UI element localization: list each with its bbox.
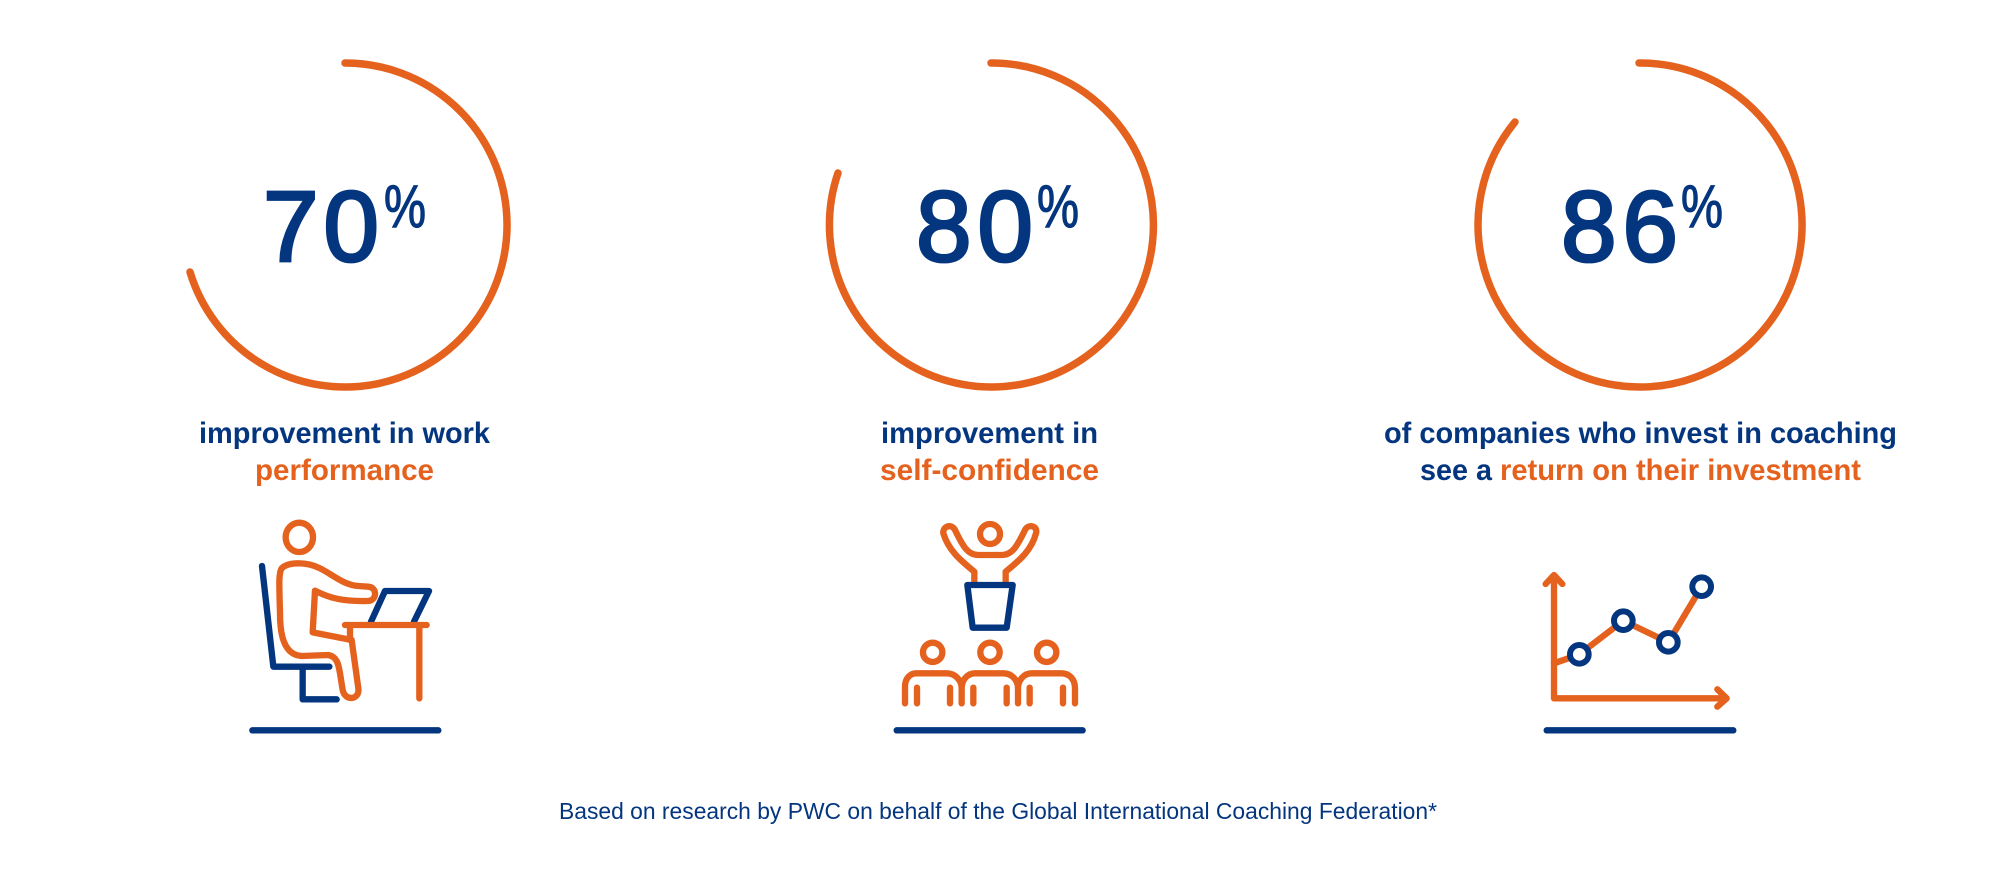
icon: rising line chart [1546, 575, 1733, 730]
label: of companies who invest in coaching see a return on their investment [1384, 417, 1897, 487]
statistic: 86%: 86 [1561, 171, 1678, 283]
label: improvement in work performance: performance [255, 454, 434, 487]
statistic: 86%: % [1681, 173, 1723, 240]
statistic: 80%: % [1037, 173, 1079, 240]
progress ring: 86% [1478, 63, 1802, 387]
statistic: 70%: % [384, 173, 426, 240]
label: of companies who invest in coaching see a return on their investment: see a [1420, 454, 1492, 487]
label: improvement in self-confidence: self-confidence [880, 454, 1099, 487]
statistic: 70%: 70 [263, 171, 379, 283]
label: improvement in work performance: improvement in work [199, 417, 490, 450]
label: improvement in self-confidence [880, 417, 1099, 487]
label: of companies who invest in coaching see a return on their investment: of companies who invest in coaching [1384, 417, 1897, 450]
progress ring: 80% [829, 63, 1153, 387]
label: improvement in work performance [199, 417, 490, 487]
icon: speaker with raised arms above audience [897, 524, 1083, 730]
panel: 86% return on investment [1384, 63, 1897, 730]
panel: 70% work performance [190, 63, 507, 730]
label: improvement in self-confidence: improvement in [881, 417, 1098, 450]
label: of companies who invest in coaching see a return on their investment: return on their investment [1500, 454, 1861, 487]
progress ring: 70% [190, 63, 507, 387]
panel: 80% self-confidence [829, 63, 1153, 730]
statistic: 80%: 80 [916, 171, 1033, 283]
icon: person working at laptop [252, 523, 438, 730]
footer source note: Based on research by PWC on behalf of the Global International Coaching Federation* [559, 798, 1437, 824]
